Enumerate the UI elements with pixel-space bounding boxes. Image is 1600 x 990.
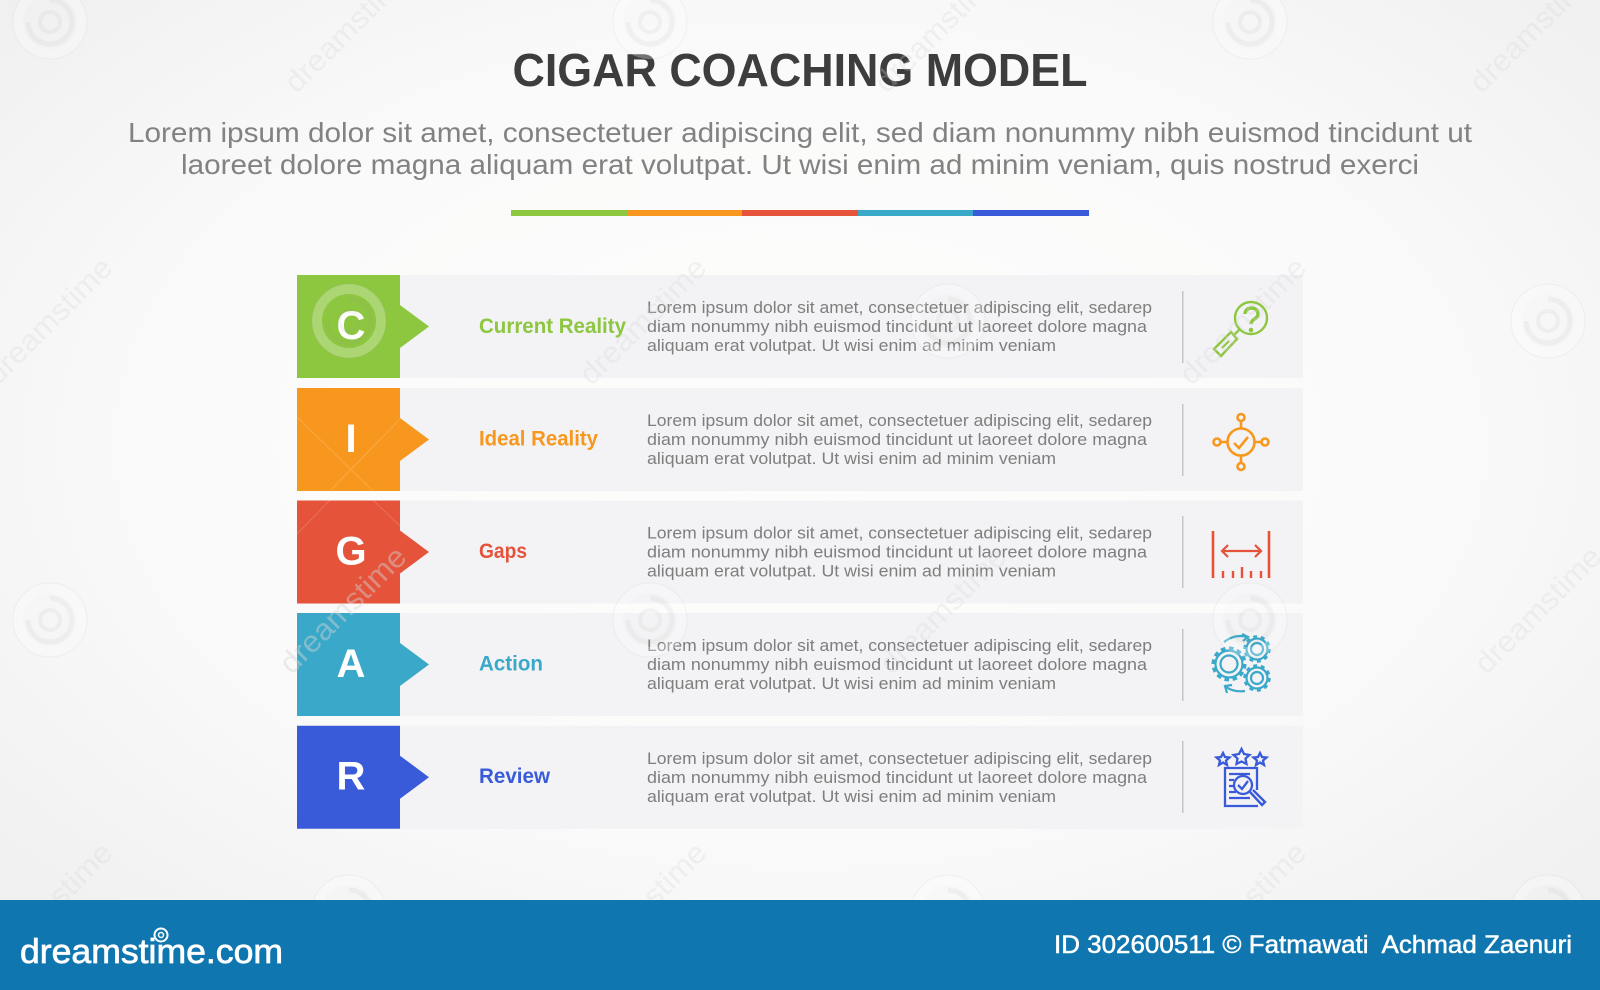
letter badge G xyxy=(297,500,429,604)
label I: Ideal Reality xyxy=(479,428,598,450)
icon: hub with check mark xyxy=(1214,414,1268,470)
letter badge C xyxy=(297,275,429,378)
letter badge A xyxy=(297,613,429,716)
watermark: dreamstime xyxy=(1173,251,1313,391)
row: A Action xyxy=(297,613,1303,716)
body text C: aliquam erat volutpat. Ut wisi enim ad minim veniam xyxy=(647,337,1056,355)
watermark: dreamstime xyxy=(573,836,713,976)
body text I: Lorem ipsum dolor sit amet, consectetuer adipiscing elit, sedarep xyxy=(647,412,1152,430)
panel background C xyxy=(400,275,1303,378)
row: I Ideal Reality xyxy=(297,388,1303,491)
body text C xyxy=(647,299,1152,355)
row: G Gaps xyxy=(297,500,1303,604)
footer logo: dreamstime.com xyxy=(20,933,283,971)
row: C Current Reality xyxy=(297,275,1303,378)
panel background I xyxy=(400,388,1303,491)
watermark: dreamstime xyxy=(573,251,713,391)
body text A: Lorem ipsum dolor sit amet, consectetuer adipiscing elit, sedarep xyxy=(647,637,1152,655)
label C: Current Reality xyxy=(479,315,626,338)
subtitle text: laoreet dolore magna aliquam erat volutpat. Ut wisi enim ad minim veniam, quis nostrud exerci xyxy=(181,149,1419,180)
label G: Gaps xyxy=(479,540,527,563)
footer credit: ID 302600511 © Fatmawati Achmad Zaenuri xyxy=(1054,931,1572,959)
body text R xyxy=(647,750,1152,806)
body text C: diam nonummy nibh euismod tincidunt ut laoreet dolore magna xyxy=(647,318,1148,336)
letter badge A: A xyxy=(337,642,365,686)
letter badge C: C xyxy=(337,304,365,348)
label R: Review xyxy=(479,765,551,788)
footer bar xyxy=(0,900,1600,990)
body text I: diam nonummy nibh euismod tincidunt ut laoreet dolore magna xyxy=(647,431,1148,449)
colour divider bar xyxy=(511,210,1089,216)
body text G: diam nonummy nibh euismod tincidunt ut laoreet dolore magna xyxy=(647,544,1148,562)
body text R: diam nonummy nibh euismod tincidunt ut laoreet dolore magna xyxy=(647,769,1148,787)
label A: Action xyxy=(479,652,543,676)
letter badge G: G xyxy=(335,530,367,574)
row: R Review xyxy=(297,726,1303,829)
panel background A xyxy=(400,613,1303,716)
body text R: aliquam erat volutpat. Ut wisi enim ad minim veniam xyxy=(647,788,1056,806)
body text G xyxy=(647,524,1152,580)
watermark: dreamstime xyxy=(873,540,1013,680)
body text C: Lorem ipsum dolor sit amet, consectetuer adipiscing elit, sedarep xyxy=(647,299,1152,317)
icon: gears xyxy=(1214,634,1269,693)
watermark: dreamstime xyxy=(273,540,413,680)
title: CIGAR COACHING MODEL xyxy=(512,44,1088,96)
subtitle text: Lorem ipsum dolor sit amet, consectetuer adipiscing elit, sed diam nonummy nibh euismod tincidunt ut xyxy=(128,117,1472,148)
body text A: aliquam erat volutpat. Ut wisi enim ad minim veniam xyxy=(647,675,1056,693)
letter badge R: R xyxy=(337,755,366,799)
body text G: Lorem ipsum dolor sit amet, consectetuer adipiscing elit, sedarep xyxy=(647,524,1152,542)
body text R: Lorem ipsum dolor sit amet, consectetuer adipiscing elit, sedarep xyxy=(647,750,1152,768)
body text I xyxy=(647,412,1152,468)
icon: rated document with magnifier xyxy=(1216,749,1266,806)
watermark: dreamstime xyxy=(1173,836,1313,976)
panel background R xyxy=(400,726,1303,829)
letter badge I: I xyxy=(345,417,357,461)
body text I: aliquam erat volutpat. Ut wisi enim ad minim veniam xyxy=(647,450,1056,468)
panel background G xyxy=(400,500,1303,604)
letter badge R xyxy=(297,726,429,829)
body text G: aliquam erat volutpat. Ut wisi enim ad minim veniam xyxy=(647,562,1056,580)
watermark: dreamstime xyxy=(1468,540,1600,680)
subtitle text xyxy=(128,117,1472,180)
letter badge I xyxy=(297,388,429,491)
icon: gap measurement xyxy=(1213,531,1269,578)
body text A: diam nonummy nibh euismod tincidunt ut laoreet dolore magna xyxy=(647,656,1148,674)
body text A xyxy=(647,637,1152,693)
icon: magnifier with question mark xyxy=(1214,302,1267,356)
